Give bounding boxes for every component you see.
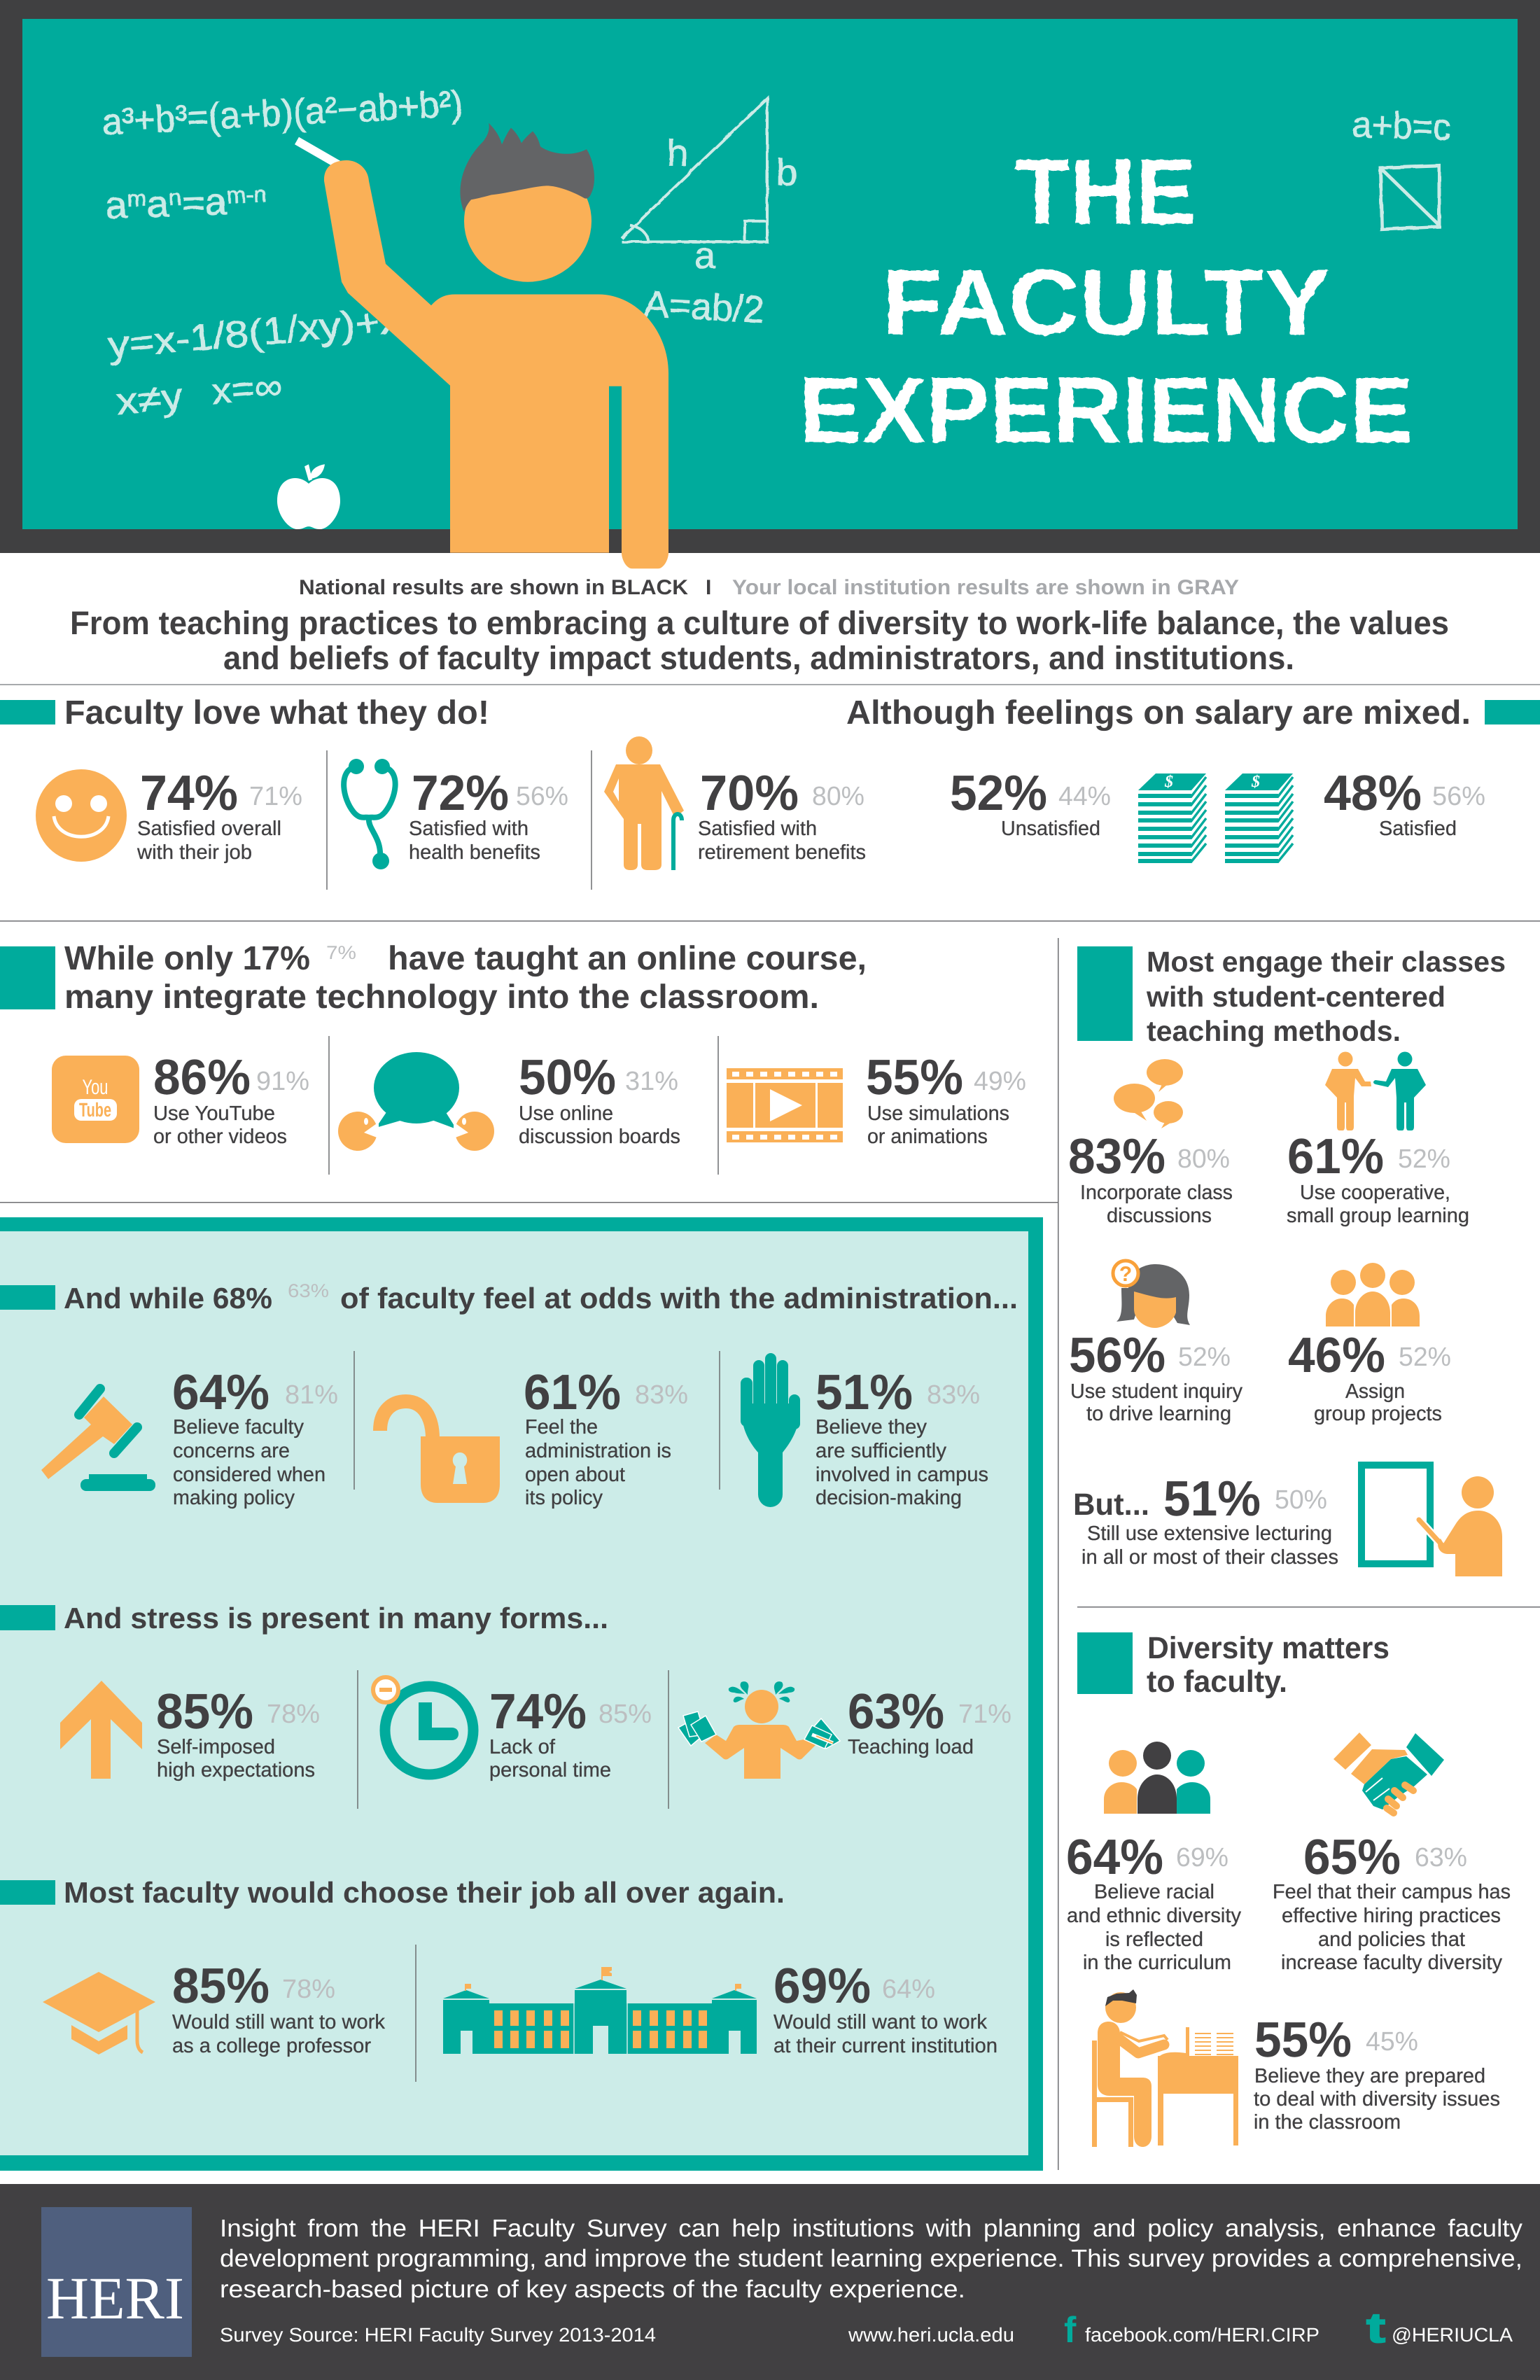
stat: student inquiry: to drive learning: [1086, 1403, 1231, 1425]
icon: open lock: [380, 1401, 500, 1503]
chalk formulas: n: [168, 185, 182, 210]
heading: While only 17%: [64, 940, 310, 977]
icon: YouTube: [52, 1056, 139, 1143]
stat: hiring practices: and policies that: [1318, 1928, 1465, 1951]
stat: discussion boards: Use online: [519, 1102, 613, 1125]
stat: unsatisfied: Unsatisfied: [1001, 818, 1100, 840]
icon: teacher figure: [324, 123, 668, 568]
stat: simulations: or animations: [867, 1126, 988, 1148]
stat: satisfied overall: 74%: [140, 766, 238, 821]
stat: expectations: high expectations: [157, 1759, 315, 1782]
stat: curriculum: in the curriculum: [1083, 1952, 1231, 1974]
stat: health benefits: [409, 766, 568, 864]
chalk formulas: a: [146, 183, 170, 225]
panel: technology: [0, 940, 1026, 1175]
stat: policy: [172, 1365, 338, 1509]
stat: satisfied overall: Satisfied overall: [137, 818, 281, 840]
stat: policy: 64%: [172, 1365, 270, 1420]
stat: satisfied: [1324, 766, 1485, 840]
icon: person at desk: [1092, 1989, 1238, 2147]
stat: classroom diversity: Believe they are prepared: [1254, 2065, 1485, 2087]
stat: simulations: 49%: [974, 1067, 1026, 1096]
heading: with student-centered: [1146, 981, 1446, 1013]
heading: Although feelings on salary are mixed.: [846, 694, 1471, 732]
text: survey source: Survey Source: HERI Faculty Survey 2013-2014: [220, 2324, 656, 2346]
icon: money stacks: $: [1251, 773, 1260, 791]
icon: gavel: [41, 1389, 155, 1491]
stat: decision-making: [816, 1365, 988, 1509]
stat: satisfied overall: 71%: [249, 782, 302, 811]
panel: student-centered teaching: [1068, 946, 1506, 1576]
stat: lecturing: in all or most of their classes: [1082, 1546, 1338, 1569]
icon: raised hand: [741, 1353, 800, 1507]
stat: retirement benefits: [698, 766, 866, 864]
stat: classroom diversity: in the classroom: [1254, 2111, 1401, 2134]
intro text: and beliefs of faculty impact students, administrators, and institutions.: [223, 639, 1294, 676]
heading: [1077, 946, 1506, 1047]
stat: current institution: 69%: [774, 1959, 871, 2014]
icon: up arrow: [60, 1681, 142, 1779]
stat: lecturing: 51%: [1163, 1471, 1261, 1527]
stat: discussion boards: 31%: [625, 1067, 678, 1096]
heading: Diversity matters: [1147, 1631, 1390, 1665]
stat: expectations: Self-imposed: [157, 1736, 275, 1758]
chalk formulas: [101, 83, 1452, 423]
stat: class discussions: 83%: [1068, 1129, 1166, 1184]
stat: open administration: its policy: [525, 1487, 603, 1509]
chalk formulas: m-n: [226, 182, 267, 208]
legend line: Your local institution results are shown in GRAY: [732, 576, 1239, 599]
stat: personal time: personal time: [489, 1759, 611, 1782]
logo: HERI: [41, 2207, 192, 2357]
text: survey insight: Insight from the HERI Faculty Survey can help institutions with planning and policy analysis, enhance faculty: [220, 2215, 1523, 2242]
panel: faculty love what they do: [0, 694, 866, 890]
stat: decision-making: involved in campus: [816, 1464, 988, 1486]
icon: apple: [277, 464, 340, 529]
stat: YouTube: 86%: [153, 1050, 251, 1105]
title: FACULTY: [882, 250, 1330, 354]
chalk formulas: a: [104, 185, 127, 227]
stat: satisfied: Satisfied: [1379, 818, 1457, 840]
stat: small group learning: Use cooperative,: [1300, 1182, 1450, 1204]
legend line: [299, 576, 1239, 599]
icon: discussion: [338, 1052, 494, 1151]
panel: footer: [0, 2184, 1540, 2380]
stat: curriculum: is reflected: [1105, 1928, 1203, 1951]
stat: expectations: [156, 1684, 320, 1782]
stat: curriculum: Believe racial: [1094, 1881, 1214, 1903]
stat: college professor: 85%: [172, 1959, 270, 2014]
stat: policy: making policy: [173, 1487, 295, 1509]
text: survey insight: development programming, and improve the student learning experience. This survey provides a comprehensive,: [220, 2245, 1522, 2272]
stat: current institution: [774, 1959, 997, 2057]
stat: personal time: 85%: [598, 1700, 652, 1729]
stat: open administration: open about: [525, 1464, 625, 1486]
stat: satisfied: 56%: [1432, 782, 1485, 811]
stat: simulations: [866, 1050, 1026, 1148]
stat: policy: Believe faculty: [173, 1416, 304, 1438]
stat: college professor: 78%: [282, 1975, 335, 2004]
stat: classroom diversity: [1254, 2012, 1500, 2134]
stat: curriculum: [1066, 1830, 1241, 1974]
heading: administration: [0, 1280, 1018, 1315]
stat: discussion boards: [519, 1050, 680, 1148]
icon: diverse group: [1104, 1742, 1210, 1814]
stat: policy: concerns are: [173, 1440, 290, 1462]
icon: student with question: ?: [1119, 1263, 1132, 1286]
stat: hiring practices: increase faculty diversity: [1281, 1952, 1502, 1974]
stat: policy: considered when: [173, 1464, 326, 1486]
icon: smiley: [36, 769, 127, 862]
icon: group of three: [1326, 1263, 1420, 1326]
stat: simulations: 55%: [866, 1050, 963, 1105]
stat: unsatisfied: [950, 766, 1111, 840]
stat: student inquiry: 56%: [1069, 1328, 1166, 1383]
stat: teaching load: [848, 1684, 1011, 1758]
stat: classroom diversity: to deal with diversity issues: [1254, 2088, 1500, 2110]
text: survey insight: [220, 2215, 1523, 2303]
stat: group projects: Assign: [1345, 1380, 1405, 1403]
stat: lecturing: 50%: [1275, 1485, 1327, 1515]
heading: administration: And while 68%: [64, 1282, 272, 1315]
stat: satisfied overall: with their job: [136, 841, 252, 864]
stat: decision-making: 83%: [927, 1380, 980, 1410]
stat: decision-making: 51%: [816, 1365, 913, 1420]
icon: film strip: [727, 1068, 843, 1142]
text: twitter: @HERIUCLA: [1392, 2324, 1513, 2346]
stat: personal time: Lack of: [489, 1736, 556, 1758]
icon: campus building: [443, 1967, 757, 2054]
stat: open administration: Feel the: [525, 1416, 598, 1438]
stat: open administration: 83%: [635, 1380, 688, 1410]
stat: current institution: 64%: [882, 1975, 935, 2004]
stat: health benefits: 56%: [516, 782, 568, 811]
panel: salary: [846, 694, 1540, 862]
chalk formulas: a³+b³=(a+b)(a²−ab+b²): [101, 83, 464, 143]
stat: open administration: 61%: [524, 1365, 621, 1420]
stat: satisfied overall: [136, 766, 302, 864]
chalk formulas: x≠y: [115, 376, 185, 423]
title: EXPERIENCE: [799, 358, 1413, 462]
text: facebook: facebook.com/HERI.CIRP: [1085, 2324, 1320, 2346]
icon: money stacks: $: [1164, 773, 1173, 791]
chalk formulas: x=∞: [210, 365, 284, 412]
stat: open administration: [524, 1365, 688, 1509]
heading: to faculty.: [1147, 1665, 1287, 1699]
stat: simulations: Use simulations: [867, 1102, 1009, 1125]
chalk formulas: a+b=c: [1352, 104, 1452, 148]
stat: group projects: [1288, 1328, 1451, 1425]
intro text: [70, 604, 1449, 676]
stat: health benefits: 72%: [412, 766, 509, 821]
heading: administration: of faculty feel at odds with the administration...: [340, 1282, 1018, 1315]
heading: teaching methods.: [1147, 1015, 1401, 1047]
text: survey insight: research-based picture of key aspects of the faculty experience.: [220, 2276, 965, 2303]
icon: speech bubbles: [1114, 1059, 1183, 1128]
heading: have taught an online course,: [388, 940, 867, 977]
stat: curriculum: and ethnic diversity: [1067, 1905, 1241, 1927]
stat: policy: 81%: [285, 1380, 338, 1410]
stat: curriculum: 69%: [1176, 1843, 1228, 1872]
chalk formulas: h: [667, 133, 688, 174]
panel: administration, stress, career: [0, 1217, 1043, 2171]
stat: group projects: 46%: [1288, 1328, 1385, 1383]
stat: teaching load: 63%: [848, 1684, 944, 1740]
stat: college professor: [172, 1959, 385, 2057]
stat: class discussions: [1068, 1129, 1233, 1227]
icon: YouTube: Tube: [79, 1099, 111, 1121]
stat: classroom diversity: 55%: [1254, 2012, 1352, 2068]
chalk formulas: A=ab/2: [643, 284, 765, 331]
stat: small group learning: [1287, 1129, 1469, 1227]
panel: chalkboard header: [0, 0, 1540, 568]
stat: student inquiry: Use student inquiry: [1070, 1380, 1242, 1403]
stat: discussion boards: discussion boards: [519, 1126, 680, 1148]
stat: hiring practices: [1273, 1830, 1511, 1974]
stat: expectations: 78%: [267, 1700, 320, 1729]
icon: lecturer at board: [1362, 1465, 1502, 1576]
stat: decision-making: decision-making: [816, 1487, 962, 1509]
stat: class discussions: Incorporate class: [1080, 1182, 1233, 1204]
icon: stethoscope: [344, 759, 396, 869]
stat: curriculum: 64%: [1066, 1830, 1163, 1885]
heading: many integrate technology into the classroom.: [64, 979, 819, 1016]
stat: YouTube: Use YouTube: [153, 1102, 275, 1125]
stat: decision-making: are sufficiently: [816, 1440, 946, 1462]
stat: personal time: [489, 1684, 652, 1782]
stat: current institution: at their current institution: [774, 2035, 997, 2057]
icon: money stacks: [1138, 773, 1293, 862]
icon: stressed teacher with papers: [678, 1681, 840, 1779]
stat: class discussions: 80%: [1177, 1144, 1230, 1174]
stat: decision-making: Believe they: [816, 1416, 927, 1438]
stat: college professor: as a college professor: [172, 2035, 371, 2057]
stat: current institution: Would still want to work: [774, 2011, 987, 2033]
stat: hiring practices: effective hiring practices: [1282, 1905, 1501, 1927]
chalk formulas: y=x-1/8(1/xy)+x: [106, 300, 402, 366]
stat: hiring practices: 65%: [1303, 1830, 1401, 1885]
title: [799, 139, 1413, 462]
stat: retirement benefits: retirement benefits: [698, 841, 866, 864]
chalk formulas: =a: [181, 181, 228, 224]
icon: facebook: f: [1064, 2310, 1077, 2351]
stat: unsatisfied: 52%: [950, 766, 1047, 821]
chalk formulas: a: [694, 235, 716, 276]
heading: [1077, 1631, 1390, 1699]
icon: retiree with cane: [604, 736, 684, 870]
heading: Most engage their classes: [1147, 946, 1506, 978]
stat: retirement benefits: 80%: [812, 782, 864, 811]
stat: small group learning: 52%: [1398, 1144, 1450, 1174]
heading: Faculty love what they do!: [64, 694, 489, 732]
stat: open administration: administration is: [525, 1440, 671, 1462]
stat: teaching load: 71%: [958, 1700, 1011, 1729]
stat: small group learning: small group learning: [1287, 1205, 1469, 1227]
stat: hiring practices: 63%: [1415, 1843, 1467, 1872]
icon: handshake: [1334, 1732, 1444, 1813]
stat: lecturing: [1073, 1471, 1338, 1569]
icon: graduation cap: [43, 1972, 155, 2054]
heading: [0, 940, 867, 1016]
stat: group projects: group projects: [1314, 1403, 1442, 1425]
chalk formulas: m: [127, 186, 147, 211]
legend line: I: [706, 576, 711, 599]
stat: classroom diversity: 45%: [1366, 2027, 1418, 2057]
heading: choose again: Most faculty would choose their job all over again.: [64, 1876, 785, 1909]
stat: teaching load: Teaching load: [848, 1736, 974, 1758]
heading: stress: And stress is present in many forms...: [64, 1602, 608, 1634]
heading: 7%: [326, 942, 356, 963]
stat: hiring practices: Feel that their campus has: [1273, 1881, 1511, 1903]
legend line: National results are shown in BLACK: [299, 576, 688, 599]
stat: satisfied: 48%: [1324, 766, 1422, 821]
stat: unsatisfied: 44%: [1058, 782, 1111, 811]
stat: personal time: 74%: [489, 1684, 587, 1740]
icon: chalk: [297, 141, 338, 164]
stat: lecturing: But...: [1073, 1488, 1149, 1522]
icon: twitter: t: [1366, 2304, 1385, 2351]
logo: HERI: HERI: [46, 2264, 184, 2332]
icon: YouTube: You: [83, 1076, 108, 1099]
stat: YouTube: [153, 1050, 309, 1148]
stat: health benefits: Satisfied with: [409, 818, 528, 840]
icon: student with question: [1113, 1261, 1190, 1328]
stat: YouTube: or other videos: [153, 1126, 287, 1148]
stat: discussion boards: 50%: [519, 1050, 616, 1105]
icon: clock: [373, 1677, 473, 1774]
icon: two people: [1325, 1051, 1426, 1130]
heading: administration: 63%: [288, 1280, 329, 1301]
text: website: www.heri.ucla.edu: [848, 2324, 1014, 2346]
stat: lecturing: Still use extensive lecturing: [1087, 1522, 1332, 1545]
stat: small group learning: 61%: [1287, 1129, 1384, 1184]
stat: group projects: 52%: [1399, 1343, 1451, 1372]
title: THE: [1014, 139, 1196, 244]
stat: student inquiry: [1069, 1328, 1242, 1425]
chalk formulas: b: [776, 152, 797, 193]
stat: health benefits: health benefits: [409, 841, 540, 864]
stat: retirement benefits: 70%: [700, 766, 799, 821]
stat: college professor: Would still want to work: [172, 2011, 385, 2033]
intro text: From teaching practices to embracing a culture of diversity to work-life balance, the values: [70, 604, 1449, 641]
stat: expectations: 85%: [156, 1684, 253, 1740]
stat: student inquiry: 52%: [1178, 1343, 1231, 1372]
stat: class discussions: discussions: [1107, 1205, 1212, 1227]
stat: YouTube: 91%: [256, 1067, 309, 1096]
panel: diversity: [1066, 1631, 1511, 2147]
stat: retirement benefits: Satisfied with: [698, 818, 817, 840]
